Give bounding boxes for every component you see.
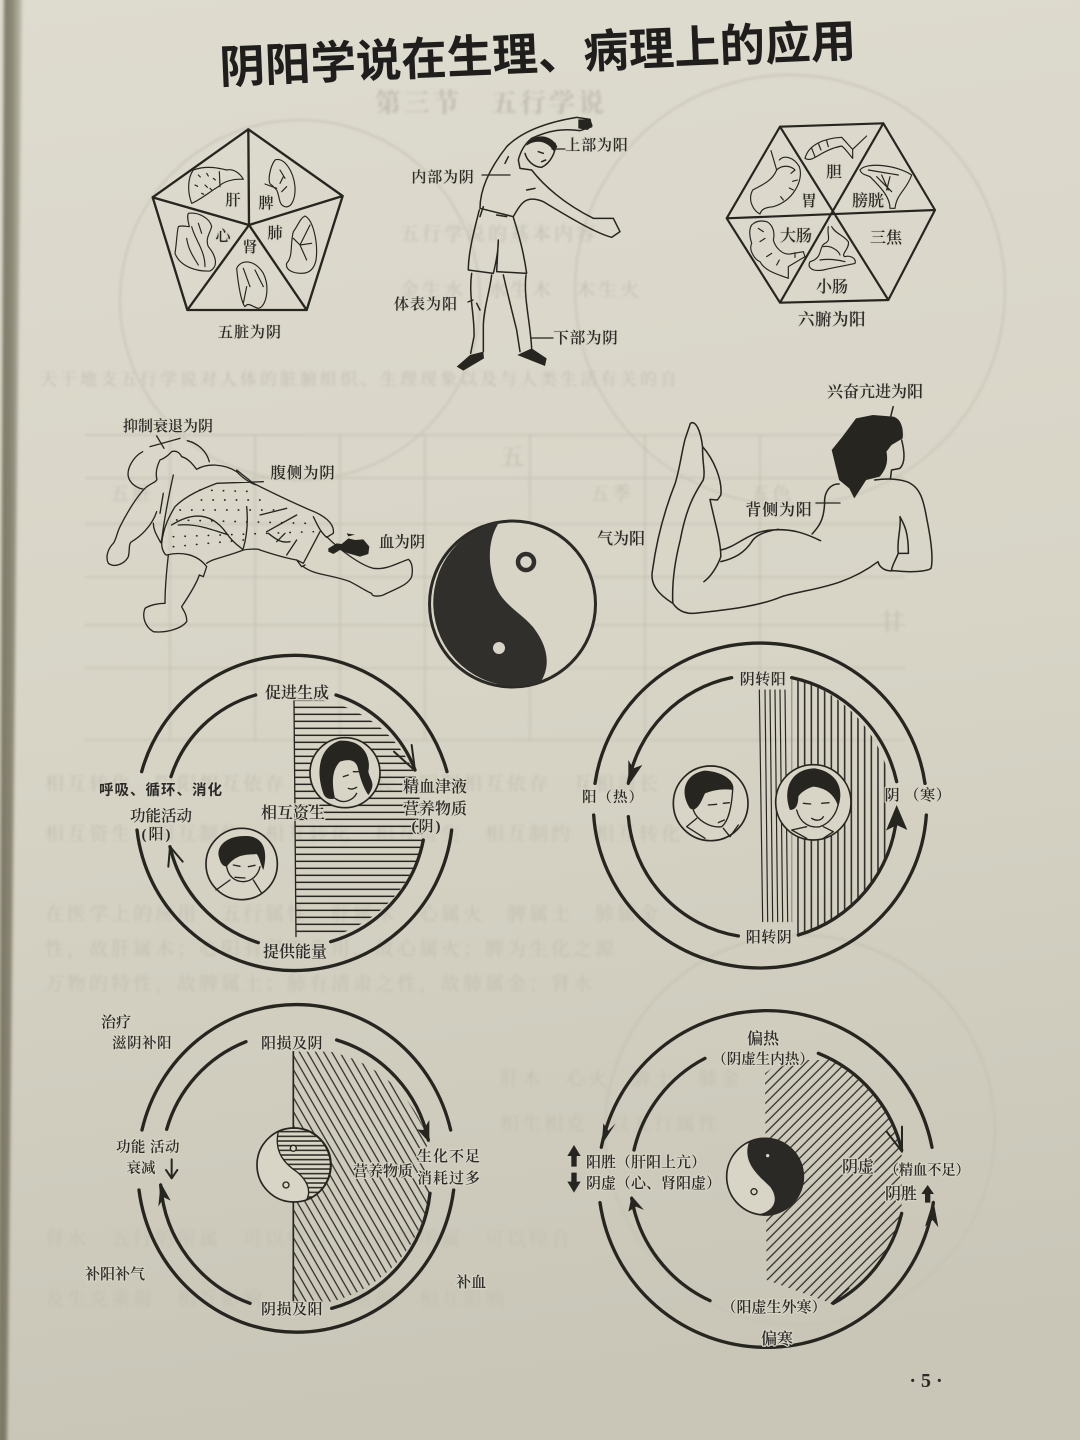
labels (394, 136, 629, 347)
hatched half disc (765, 1060, 902, 1303)
organ labels: 胃 (801, 192, 817, 210)
hair (832, 415, 903, 498)
icon: small intestine (809, 227, 855, 270)
labels: 滋阴补阳 (112, 1035, 172, 1052)
organ labels: 肺 (267, 224, 283, 242)
organ labels: 脾 (258, 195, 274, 212)
pointer line (816, 502, 840, 504)
labels: （阳虚生外寒） (721, 1298, 827, 1316)
icon: liver (189, 167, 243, 203)
labels (85, 1014, 486, 1318)
icon: man portrait (206, 828, 277, 900)
labels: （阴虚生内热） (712, 1050, 814, 1068)
figure: man lying on his back (107, 436, 412, 632)
background: faint show-through of the reverse page: 性，故肝属木；心阳有温煦作用，故心属火；脾为生化之源 (45, 938, 617, 960)
background: faint show-through of the reverse page: 相互转化 阴阳相互依存 互相消长 阴阳相互依存 互相消长 (45, 773, 661, 795)
background: faint show-through of the reverse page: 相互资生 相互制约 相互转化 相互资生 相互制约 相互转化 (45, 823, 683, 845)
striped half disc (294, 701, 423, 937)
background: faint show-through of the reverse page: 及生克乘侮 相互影响 及生克乘侮 相互影响 (45, 1288, 507, 1310)
panel: excess and deficiency circle (567, 1011, 970, 1348)
page number: · 5 · (909, 1370, 943, 1392)
icon: boy portrait (673, 766, 748, 841)
labels: 偏热 (747, 1029, 780, 1048)
labels: 治疗 (101, 1014, 131, 1031)
title: 阴阳学说在生理、病理上的应用 (218, 16, 857, 93)
labels (597, 383, 923, 548)
labels: 兴奋亢进为阳 (827, 383, 923, 401)
caption: 五脏为阴 (218, 323, 282, 341)
labels: 血为阴 (379, 533, 425, 551)
panel: six fu organs hexagon (727, 123, 935, 329)
labels: 呼吸、循环、消化 (99, 781, 223, 799)
caption: 六腑为阳 (798, 310, 866, 329)
hatched half disc (293, 1052, 430, 1302)
panel: reclining figure, yang aspects (597, 383, 932, 613)
icon: spleen (265, 159, 295, 207)
icon: bladder (860, 165, 912, 208)
organ labels: 大肠 (780, 227, 812, 245)
panel: standing man (394, 117, 629, 371)
panel: yin-yang transformation circle (582, 643, 951, 968)
labels: 补血 (456, 1274, 486, 1291)
labels: 上部为阳 (565, 136, 629, 154)
labels: 阳（热） (582, 788, 644, 806)
labels: 阴虚 (842, 1157, 874, 1176)
organ labels: 胆 (826, 163, 842, 181)
arrow rings (600, 1011, 933, 1347)
labels (582, 671, 951, 946)
organ labels: 小肠 (816, 278, 848, 296)
background: faint show-through of the reverse page: 万物的特性，故脾属土；肺有清肃之性，故肺属金；肾水 (45, 973, 595, 995)
labels: 内部为阴 (411, 168, 475, 186)
panel: large yin-yang symbol (430, 521, 596, 687)
labels: 功能 活动 (116, 1138, 180, 1156)
background: faint show-through of the reverse page: 甘 (880, 609, 907, 636)
labels: 偏寒 (761, 1329, 793, 1348)
background: faint show-through of the reverse page: 在医学上的应用 五行属性 肝属木 心属火 脾属土 肺属金 (45, 903, 661, 925)
panel: reclining figure, yin aspects (107, 417, 425, 632)
icon: small hatched yin-yang (257, 1128, 331, 1202)
panel: deficiency circle (85, 1005, 486, 1332)
labels: 阳胜（肝阳上亢） (586, 1153, 706, 1171)
panel: mutual generation circle (99, 655, 467, 971)
labels: 阳转阴 (746, 929, 792, 946)
background: faint show-through of the reverse page: 肝木 心火 脾土 肺金 (500, 1068, 742, 1090)
labels: 精血津液 (403, 778, 467, 796)
labels: 抑制衰退为阴 (123, 417, 213, 435)
arrow rings (594, 643, 926, 968)
icon: woman portrait (310, 738, 380, 808)
organ labels: 膀胱 (852, 192, 884, 210)
arrow rings (139, 1005, 454, 1332)
background: faint show-through of the reverse page: 五季 (590, 483, 634, 505)
labels: 衰减 (126, 1160, 156, 1177)
labels: (阳) (142, 826, 172, 843)
organ labels (215, 192, 283, 256)
labels: 背侧为阳 (745, 500, 813, 519)
labels: 生化不足 (417, 1148, 481, 1165)
background: faint show-through of the reverse page: 五 (500, 445, 527, 471)
labels (123, 417, 425, 551)
labels: 补阳补气 (85, 1266, 145, 1283)
organ labels (780, 163, 903, 296)
labels (586, 1029, 970, 1348)
background: faint show-through of the reverse page (40, 75, 1005, 1325)
background: faint show-through of the reverse page: 第三节 五行学说 (375, 89, 607, 118)
shorts dots (173, 490, 313, 547)
labels: 阴虚（心、肾阳虚） (586, 1174, 721, 1192)
figure: bending man (457, 117, 620, 371)
labels (99, 684, 467, 961)
thin down arrow (166, 1159, 177, 1178)
labels: 体表为阳 (394, 295, 458, 313)
icon: up and down arrows (567, 1145, 934, 1203)
icon: small yin-yang (727, 1138, 804, 1215)
icon: lung (286, 216, 317, 273)
circle diagram (137, 655, 452, 971)
labels: 提供能量 (263, 942, 327, 961)
labels: 阴 （寒） (885, 786, 951, 804)
pentagon diagram (153, 129, 343, 310)
hexagon diagram (727, 123, 935, 303)
labels: （精血不足） (884, 1161, 970, 1179)
labels: 阴胜 (885, 1184, 917, 1203)
icon: girl portrait (776, 765, 851, 840)
background: faint show-through of the reverse page: 相生相克 以五行属性 (500, 1113, 720, 1135)
icon: gallbladder (805, 136, 867, 159)
circle diagram (139, 1005, 454, 1332)
labels: 营养物质 (353, 1162, 413, 1180)
arrow rings (137, 655, 452, 971)
labels: 营养物质 (403, 799, 467, 818)
panel: five zang organs pentagon (153, 129, 343, 341)
icon: large intestine (750, 221, 805, 278)
labels: 功能活动 (130, 806, 192, 825)
icon: kidney (237, 262, 267, 308)
labels: 阴转阳 (740, 671, 786, 688)
organ labels: 肝 (225, 192, 241, 209)
blood stain (328, 533, 369, 557)
labels: 促进生成 (265, 684, 329, 702)
labels: 相互资生 (261, 804, 325, 822)
labels: 下部为阴 (553, 329, 619, 347)
figure: woman lying prone (652, 407, 932, 613)
background: faint show-through of the reverse page: 五脏 (110, 483, 154, 505)
organ labels: 心 (215, 228, 232, 245)
background: faint show-through of the reverse page: 五色 (750, 483, 794, 505)
organ labels: 肾 (242, 238, 258, 256)
labels: (阴) (412, 818, 442, 835)
background: faint show-through of the reverse page: 五行学说的基本内容 (400, 223, 598, 245)
labels: 阴损及阳 (261, 1300, 323, 1318)
background: faint show-through of the reverse page: 金生水 水生木 木生火 (400, 279, 642, 301)
labels: 气为阳 (597, 530, 645, 548)
background: faint show-through of the reverse page: 肾水 五行的所属 可以综合 五行的所属 可以综合 (45, 1228, 573, 1250)
striped half disc (792, 678, 888, 935)
organ labels: 三焦 (870, 229, 903, 247)
labels: 腹侧为阴 (270, 464, 336, 482)
circle diagram (594, 643, 926, 968)
labels: 消耗过多 (417, 1169, 481, 1187)
icon: heart (175, 213, 215, 271)
circle diagram (567, 1011, 938, 1347)
pointer lines (468, 149, 565, 338)
labels: 阳损及阴 (261, 1034, 323, 1052)
icon: stomach (751, 151, 800, 214)
background: faint show-through of the reverse page: 天干地支五行学说对人体的脏腑组织、生理现象以及与人类生活有关的自 (40, 370, 680, 389)
